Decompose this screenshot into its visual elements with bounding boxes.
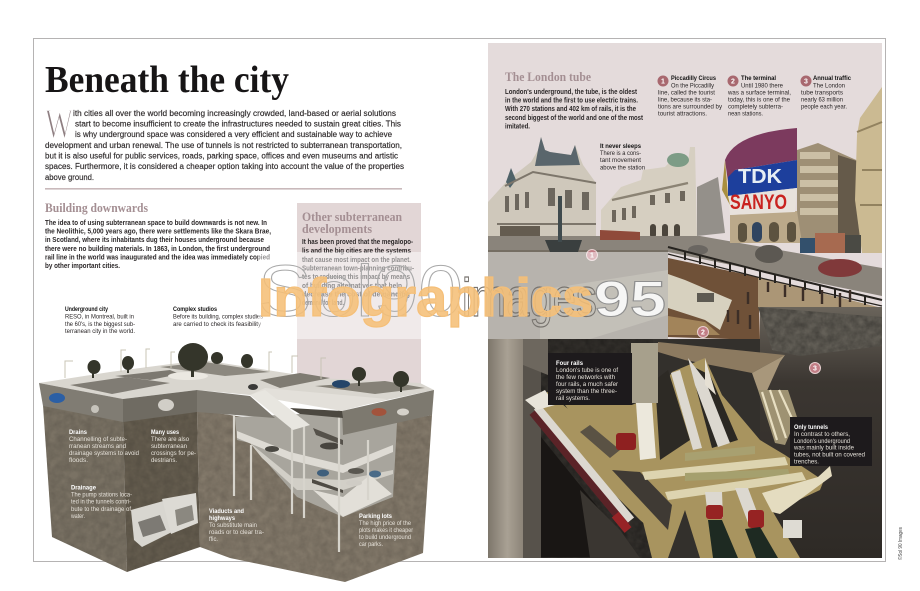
callout: only tunnels: was mainly built inside	[793, 444, 854, 452]
label: drainage	[70, 484, 132, 520]
label: underground city: the 60's, is the biggest sub-	[65, 321, 135, 328]
note 3: annual traffic: nearly 63 million	[801, 96, 843, 104]
watermark text	[258, 252, 666, 332]
label: drainage: water.	[70, 513, 85, 520]
label: underground city: terranean city in the world.	[65, 328, 135, 335]
callout: only tunnels: Only tunnels	[794, 424, 828, 431]
label: viaducts and highways: ffic.	[209, 536, 218, 543]
label: parking lots: plots makes it cheaper	[359, 527, 414, 534]
label: drains: Drains	[69, 429, 87, 436]
brown building	[797, 143, 863, 242]
concrete layer	[39, 383, 123, 422]
section: building downwards: the Neolithic, 5,000 years ago, there were settlements like the Skara Brae,	[45, 229, 271, 236]
cars	[332, 380, 350, 388]
label: many uses: Many uses	[151, 429, 179, 436]
label: viaducts and highways	[209, 508, 264, 543]
marker 3: 3	[813, 366, 817, 372]
watermark text: Sol90	[258, 252, 463, 332]
label: many uses: There are also	[151, 436, 189, 443]
label: parking lots: to build underground	[359, 534, 411, 541]
trees	[88, 343, 409, 392]
arcade base	[730, 211, 802, 243]
note 3: annual traffic: Annual traffic	[813, 75, 851, 82]
illustration: piccadilly circus street scene: SANYO	[730, 191, 787, 214]
note 1: piccadilly circus: tions are surrounded by	[658, 104, 723, 110]
illustration: underground stations and tunnels	[488, 307, 882, 558]
statue and fountain	[545, 240, 582, 252]
label: underground city	[65, 306, 135, 335]
label: complex studios: Before its building, complex studies	[173, 314, 263, 320]
illustration: piccadilly circus street scene	[488, 87, 882, 340]
label: underground city: RESO, in Montreal, built in	[65, 314, 134, 320]
label: drainage: Drainage	[71, 484, 96, 492]
heading and intro: the london tube: second biggest of the world and one of the most	[505, 115, 644, 122]
label: drains: Channelling of subte-	[69, 436, 127, 443]
label: it never sleeps: tant movement	[600, 157, 641, 164]
tracks	[708, 520, 738, 558]
note 1: piccadilly circus: On the Piccadilly	[671, 82, 715, 90]
label: parking lots: The high price of the	[359, 520, 411, 527]
road tunnels	[131, 500, 172, 547]
marker 2	[698, 326, 708, 338]
heading and intro: the london tube: The London tube	[505, 70, 591, 84]
section: building downwards: by other important cities.	[45, 263, 120, 270]
callout: four rails: Four rails	[556, 360, 583, 367]
note 2: the terminal: today, this is one of the	[728, 96, 790, 104]
label: many uses: subterranean	[151, 443, 187, 450]
central shaft	[631, 343, 658, 403]
pavement	[758, 277, 882, 317]
label: viaducts and highways: roads or to clear tra-	[209, 529, 264, 536]
note 1: piccadilly circus: line, because its sta-	[658, 96, 712, 104]
note 1: piccadilly circus: line, called the tourist	[658, 90, 715, 96]
note 2: the terminal: completely subterra-	[728, 104, 783, 110]
label: drainage: The pump stations loca-	[71, 492, 132, 498]
people	[728, 282, 850, 329]
heading and intro: the london tube: London's underground, the tube, is the oldest	[505, 89, 638, 96]
intro text block: spaces. Furthermore, it is considered a cheaper option taking into account the value of the properties	[45, 162, 404, 171]
note 2: the terminal: Until 1980 there	[741, 82, 783, 90]
pipes	[49, 393, 65, 403]
callout: four rails: London's tube is one of	[556, 367, 618, 374]
label: viaducts and highways: Viaducts and	[209, 508, 244, 515]
street	[488, 236, 882, 296]
label: many uses: crossings for pe-	[151, 450, 196, 457]
platforms and halls	[530, 392, 688, 547]
tube trains	[533, 412, 627, 526]
billboard	[725, 128, 797, 182]
panel: other subterranean developments: tes to reducing this impact by means	[302, 274, 410, 281]
heading and intro: the london tube: in the world and the first to use electric trains.	[505, 98, 638, 104]
fence	[668, 247, 882, 306]
heading and intro: the london tube	[505, 70, 644, 130]
callout: only tunnels: tubes, not built on covered	[794, 452, 865, 458]
intro text block	[45, 102, 404, 182]
marker 1: 1	[590, 252, 594, 260]
section: building downwards	[45, 201, 271, 270]
callout: only tunnels: London's underground	[794, 438, 850, 445]
intro text block: development and urban renewal. The use of tunnels is not restricted to subterranean transportation,	[45, 141, 402, 150]
label: drains: drainage systems to avoid	[69, 450, 139, 457]
callout: four rails: system than the three-	[556, 388, 617, 395]
label: parking lots	[359, 513, 414, 548]
note 1: piccadilly circus: tourist attractions.	[658, 110, 707, 118]
label: parking lots: Parking lots	[359, 513, 392, 520]
kiosk	[815, 233, 845, 253]
marker 1	[586, 250, 598, 260]
panel: other subterranean developments: lis and the big cities are the systems	[302, 248, 411, 255]
watermark text: 95	[594, 271, 666, 327]
label: it never sleeps	[600, 143, 645, 172]
section: building downwards: there were no building materials. In 1863, in London, the first underground	[45, 246, 270, 253]
label: drains: floods.	[69, 457, 88, 464]
concourse cut	[668, 258, 760, 340]
callout: four rails: rail systems.	[556, 395, 590, 402]
illustration: piccadilly circus street scene: TDK	[738, 166, 783, 188]
watermark band	[258, 252, 668, 339]
ramp	[250, 390, 310, 430]
note 2: the terminal: The terminal	[741, 75, 776, 82]
callout: only tunnels	[790, 417, 872, 466]
label: drains	[69, 429, 139, 464]
label: drainage: ted in the tunnels contri-	[71, 498, 131, 506]
parking cavity	[235, 412, 397, 517]
callout: only tunnels: In contrast to others,	[794, 431, 850, 438]
parking floors	[237, 431, 393, 473]
far right building	[855, 87, 882, 253]
watermark text: images	[462, 268, 597, 328]
panel: other subterranean developments: of building alternatives that help	[302, 283, 402, 290]
note 2: the terminal: was a surface terminal,	[727, 90, 791, 96]
label: underground city: Underground city	[65, 306, 108, 313]
street lights	[65, 349, 326, 379]
credit: ©Sol 90 Images	[897, 527, 904, 560]
label: many uses	[151, 429, 196, 464]
rock strip	[488, 339, 523, 558]
watermark text: Infographics	[258, 268, 593, 328]
centre building	[601, 147, 697, 238]
note 2: the terminal: nean stations.	[728, 110, 763, 118]
label: drainage: bute to the drainage of	[71, 506, 131, 513]
panel: other subterranean developments: developments	[302, 221, 372, 236]
left building	[488, 137, 596, 240]
section: building downwards: The idea to of using subterranean space to build downwards is not new. In	[45, 220, 267, 227]
heading and intro: the london tube: imitated.	[505, 124, 530, 130]
intro text block: start to become insufficient to create the infrastructures needed to sustain great cities. This	[75, 120, 401, 128]
section: building downwards: Building downwards	[45, 201, 148, 215]
label: it never sleeps: It never sleeps	[600, 143, 641, 150]
panel: other subterranean developments: that cause most impact on the planet.	[302, 257, 411, 264]
note 3: annual traffic	[800, 75, 851, 110]
label: it never sleeps: above the station	[600, 164, 645, 172]
label: drains: rranean streams and	[69, 443, 126, 450]
street under watermark band	[488, 250, 668, 339]
label: many uses: destrians.	[151, 457, 177, 464]
panel: the london tube	[488, 43, 882, 558]
label: complex studios	[173, 306, 263, 328]
title: Beneath the city	[45, 59, 289, 101]
callout: four rails: four rails, a much safer	[556, 381, 619, 388]
cutaway city block illustration	[39, 343, 434, 582]
panel: other subterranean developments: demand for land.	[302, 300, 344, 307]
note 2: the terminal	[727, 75, 791, 118]
callout: four rails	[548, 353, 632, 405]
heading and intro: the london tube: With 270 stations and 402 km of rails, it is the	[505, 106, 636, 113]
walkways	[685, 446, 755, 461]
intro text block: is why underground space was considered a very efficient and sustainable way to achieve	[75, 130, 393, 139]
note 1: piccadilly circus	[658, 75, 723, 118]
columns	[234, 410, 368, 552]
section: building downwards: rail line in the world was inaugurated and the idea was immediately copied	[45, 254, 270, 261]
lower trains	[705, 492, 723, 518]
cars	[755, 245, 783, 263]
intro text block: but it is also useful for public services, roads, parking space, offices and even museums and artistic	[45, 152, 398, 160]
panel: other subterranean developments: It has been proved that the megalopo-	[302, 239, 414, 246]
label: viaducts and highways: To substitute main	[209, 522, 257, 529]
label: complex studios: Complex studios	[173, 306, 217, 313]
concourse ceiling	[658, 342, 785, 373]
soil faces	[43, 405, 127, 572]
note 1: piccadilly circus: Piccadilly Circus	[671, 75, 716, 82]
panel: other subterranean developments: Subterranean town-planning contribu-	[302, 266, 415, 272]
escalator hall	[758, 390, 797, 445]
note 1: piccadilly circus: 1	[661, 78, 665, 86]
panel: other subterranean developments: decrease the cost of demanding	[302, 292, 410, 298]
label: complex studios: are carried to check its feasibility	[173, 321, 262, 328]
panel: other subterranean developments	[297, 203, 421, 393]
callout: four rails: the few networks with	[556, 374, 615, 381]
drop cap: W	[45, 102, 73, 148]
intro text block: above ground.	[45, 173, 94, 182]
marker 3	[810, 362, 820, 374]
note 3: annual traffic: people each year.	[801, 104, 847, 110]
label: viaducts and highways: highways	[209, 515, 235, 522]
panel: other subterranean developments: Other subterranean	[302, 209, 403, 224]
road surface	[39, 360, 434, 410]
label: parking lots: car parks.	[359, 541, 383, 548]
marker 2: 2	[701, 330, 705, 336]
note 3: annual traffic: tube transports	[801, 90, 843, 96]
note 3: annual traffic: 3	[804, 78, 808, 86]
label: it never sleeps: There is a cons-	[600, 150, 641, 157]
intro text block: ith cities all over the world becoming increasingly crowded, land-based or aerial solutions	[73, 109, 396, 118]
callout: only tunnels: trenches.	[794, 458, 819, 466]
section: building downwards: in Scotland, where its inhabitants dug their houses underground because	[45, 237, 264, 244]
note 2: the terminal: 2	[731, 78, 735, 86]
note 3: annual traffic: The London	[813, 82, 845, 90]
